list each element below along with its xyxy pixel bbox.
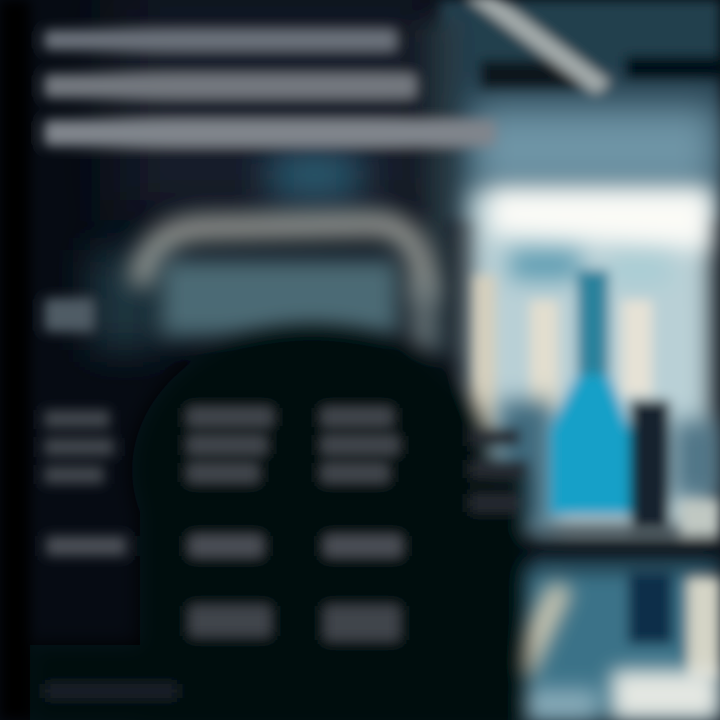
bright window: [468, 190, 720, 536]
table row 3: [190, 606, 399, 640]
table row 1: [44, 408, 528, 512]
teal bottle: [550, 270, 630, 515]
dark shelf band: [530, 538, 720, 566]
bed frame arch: [142, 224, 434, 350]
ceiling beam: [465, 0, 610, 94]
section label: [44, 298, 94, 332]
column 1: [44, 410, 114, 484]
title line 3: [44, 120, 496, 146]
footer text: [45, 684, 177, 698]
title block: [44, 30, 496, 146]
dark bottle: [630, 400, 670, 530]
table row 2: [46, 536, 401, 556]
column 2: [188, 408, 272, 482]
column 3: [322, 408, 398, 482]
bottom right reflection: [506, 566, 720, 720]
title line 1: [44, 30, 396, 50]
dark circular panel: [30, 325, 525, 720]
title line 2: [44, 74, 416, 98]
column 4: [470, 428, 528, 512]
